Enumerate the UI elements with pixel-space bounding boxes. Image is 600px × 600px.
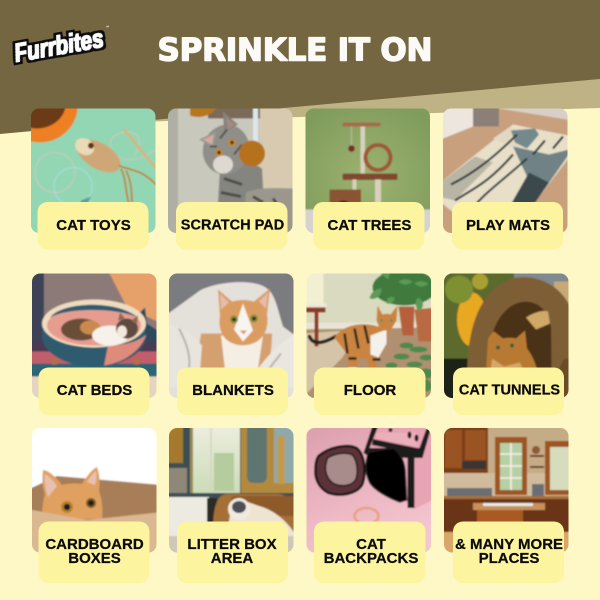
panel: cat tunnels xyxy=(444,274,568,415)
label: many more places: PLACES xyxy=(479,550,539,567)
panel: litter box area xyxy=(169,428,294,583)
label: cat trees xyxy=(313,202,424,250)
image: play mats xyxy=(443,108,568,233)
header background xyxy=(0,0,600,134)
label: play mats xyxy=(452,202,563,250)
label: play mats: PLAY MATS xyxy=(466,217,550,234)
panel: scratch pad xyxy=(168,108,292,250)
image: cardboard boxes xyxy=(32,428,156,552)
panel: floor xyxy=(306,274,431,415)
label: many more places: & MANY MORE xyxy=(455,536,563,553)
image: scratch pad xyxy=(168,108,292,233)
label: cat tunnels: CAT TUNNELS xyxy=(459,382,560,398)
logo: Furrbites: ™ xyxy=(105,24,110,30)
label: floor xyxy=(314,368,426,415)
image: cat trees xyxy=(306,108,430,233)
title: SPRINKLE IT ON xyxy=(158,32,432,68)
image: kitchen xyxy=(444,428,568,552)
label: cat tunnels xyxy=(453,368,564,415)
panel: cat trees xyxy=(306,108,430,250)
label: cat beds xyxy=(38,368,150,415)
image: cat backpacks xyxy=(306,428,431,552)
label: litter box area: AREA xyxy=(211,550,253,567)
label: cat backpacks xyxy=(314,522,426,583)
label: cat trees: CAT TREES xyxy=(328,217,411,234)
label: cat toys: CAT TOYS xyxy=(56,217,131,234)
panel: many more places xyxy=(444,428,568,583)
image: blankets xyxy=(169,274,294,398)
logo: Furrbites: Furrbites xyxy=(12,23,106,68)
label: scratch pad xyxy=(176,202,288,250)
label: scratch pad: SCRATCH PAD xyxy=(181,218,284,234)
panel: play mats xyxy=(443,108,568,250)
label: cat beds: CAT BEDS xyxy=(57,382,132,399)
label: blankets: BLANKETS xyxy=(192,382,274,399)
label: many more places xyxy=(453,522,564,583)
label: floor: FLOOR xyxy=(344,382,396,399)
image: litter box area xyxy=(169,428,294,552)
label: cardboard boxes: BOXES xyxy=(68,550,121,567)
image: cat tunnels xyxy=(444,274,568,398)
label: cat backpacks: CAT xyxy=(356,536,386,553)
label: cat backpacks: BACKPACKS xyxy=(324,550,418,567)
panel: cat beds xyxy=(32,274,156,415)
panel: cat backpacks xyxy=(306,428,431,583)
label: cardboard boxes: CARDBOARD xyxy=(45,536,144,553)
panel: blankets xyxy=(169,274,294,415)
image: cat toys xyxy=(31,108,156,233)
label: litter box area xyxy=(177,522,288,583)
image: cat beds xyxy=(32,274,156,398)
label: cardboard boxes xyxy=(38,522,150,583)
header accent band xyxy=(0,70,600,126)
panel: cat toys xyxy=(31,108,156,250)
panel: cardboard boxes xyxy=(32,428,156,583)
label: blankets xyxy=(177,368,288,415)
label: litter box area: LITTER BOX xyxy=(187,536,277,553)
label: cat toys xyxy=(38,202,148,250)
image: floor xyxy=(306,274,431,398)
